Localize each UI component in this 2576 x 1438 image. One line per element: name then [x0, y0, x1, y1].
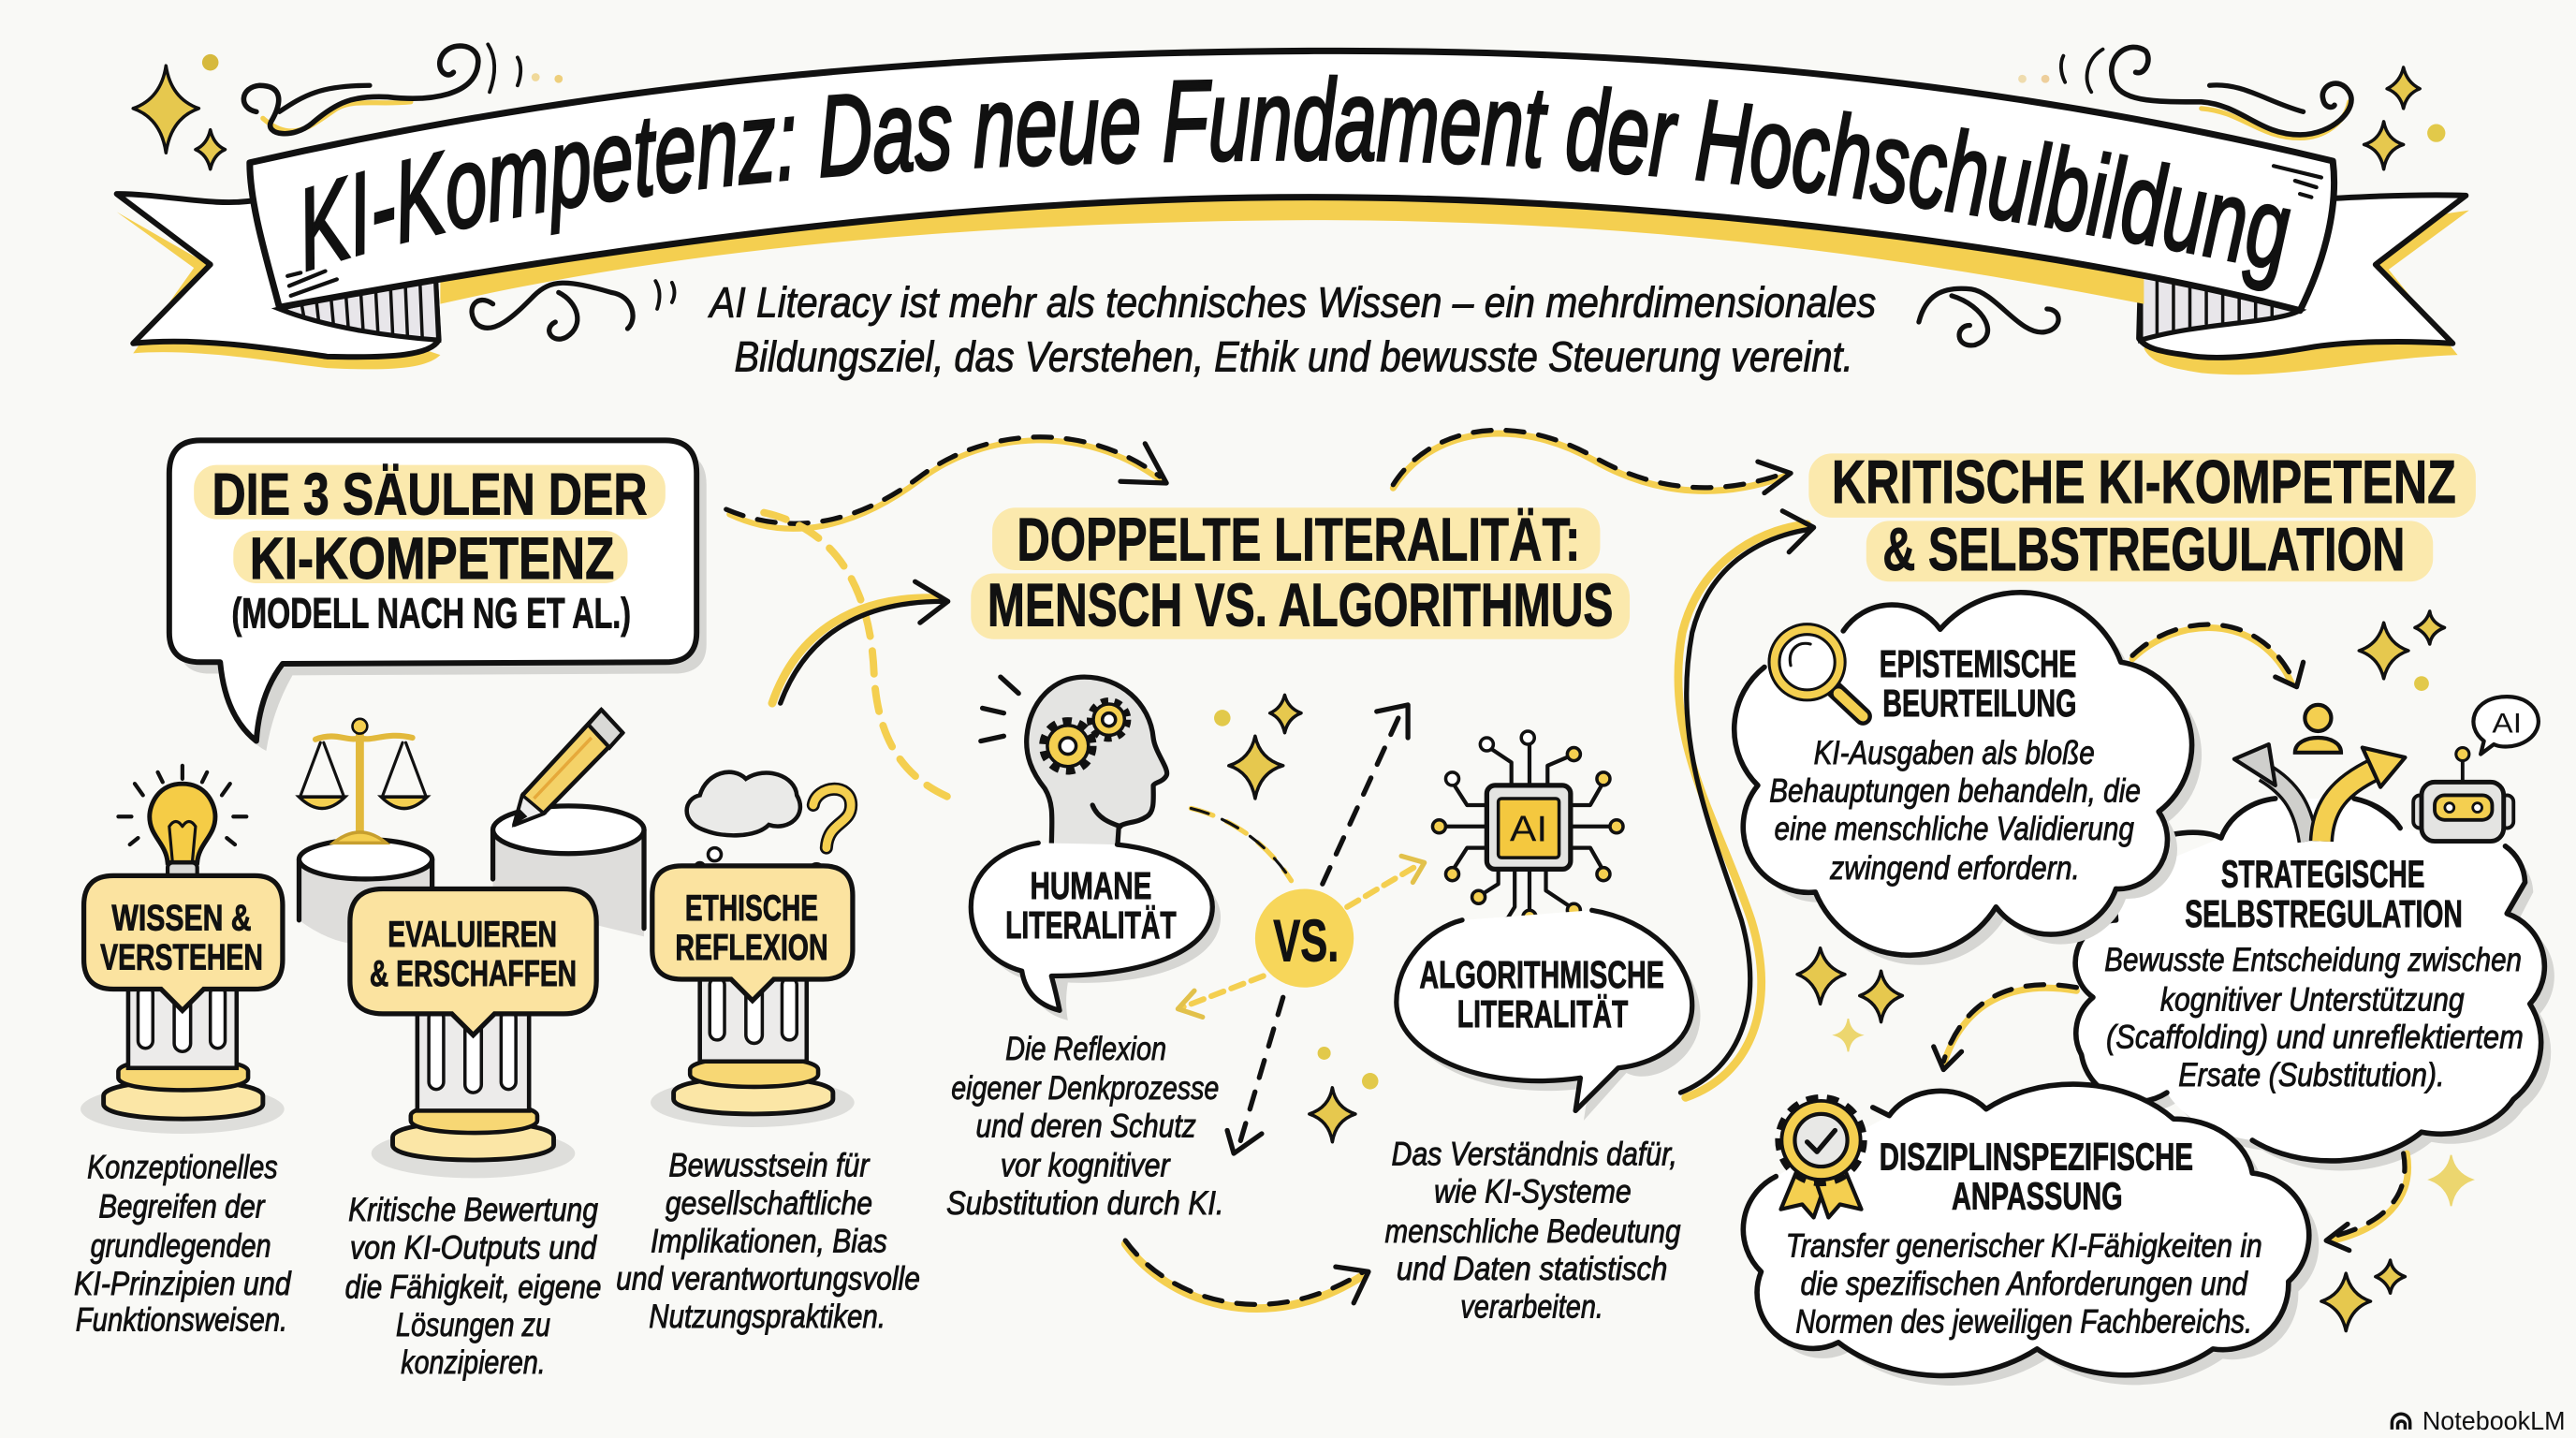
- cloud: disziplinspezifische anpassung: [1743, 1084, 2319, 1386]
- heading speech bubble: KI-KOMPETENZ: [250, 526, 614, 592]
- speech bubble: algorithmische literalitaet: LITERALITÄT: [1457, 992, 1629, 1035]
- arrow: S curve to kritische ki-kompetenz: [1678, 511, 1814, 1097]
- text: Wissen und Verstehen: [74, 1149, 292, 1339]
- icon: thought cloud and question mark: [687, 772, 851, 878]
- speech bubble: humane literalitaet: HUMANE: [1030, 864, 1151, 907]
- banner main ribbon: [250, 51, 2334, 311]
- text: humane literalitaet: Die Reflexion: [1005, 1031, 1166, 1067]
- label: Wissen und Verstehen: [84, 875, 283, 1010]
- text: Wissen und Verstehen: Funktionsweisen.: [76, 1302, 287, 1339]
- label: Wissen und Verstehen: VERSTEHEN: [100, 937, 263, 977]
- icon: AI chip: [1432, 731, 1623, 932]
- cloud: strategische selbstregulation: STRATEGISCHE: [2221, 853, 2424, 896]
- text: Evaluieren und Erschaffen: konzipieren.: [401, 1344, 546, 1381]
- text: Wissen und Verstehen: Begreifen der: [98, 1188, 266, 1225]
- text: humane literalitaet: eigener Denkprozesse: [951, 1070, 1219, 1107]
- cloud: epistemische beurteilung: [1734, 593, 2202, 965]
- cloud: strategische selbstregulation: [2075, 799, 2554, 1171]
- pillar 3: Ethische Reflexion: [616, 866, 920, 1335]
- text: algorithmische literalitaet: menschliche Bedeutung: [1385, 1213, 1681, 1250]
- subtitle: Bildungsziel, das Verstehen, Ethik und bewusste Steuerung vereint.: [735, 333, 1853, 381]
- arrow: yellow dashed curve: [764, 513, 956, 800]
- sparkle: banner left large: [133, 66, 198, 153]
- cloud: disziplinspezifische anpassung: DISZIPLINSPEZIFISCHE: [1880, 1136, 2193, 1179]
- text: Evaluieren und Erschaffen: Kritische Bewertung: [348, 1192, 598, 1228]
- subtitle: AI Literacy ist mehr als technisches Wissen – ein mehrdimensionales: [708, 279, 1876, 327]
- cloud: disziplinspezifische anpassung: ANPASSUNG: [1952, 1175, 2123, 1218]
- icon: human head with gears: [981, 677, 1167, 851]
- text: Ethische Reflexion: Implikationen, Bias: [651, 1223, 887, 1259]
- pillar 2: Evaluieren und Erschaffen: [345, 888, 601, 1381]
- icon: light bulb: [118, 766, 246, 886]
- VS badge: VS.: [1273, 909, 1339, 975]
- cloud: epistemische beurteilung: BEURTEILUNG: [1882, 682, 2076, 725]
- icon: robot with AI bubble: AI: [2492, 709, 2522, 740]
- heading: kritische ki-kompetenz: & SELBSTREGULATION: [1882, 515, 2405, 583]
- NotebookLM watermark: NotebookLM: [2422, 1406, 2566, 1435]
- cloud: epistemische beurteilung: zwingend erfordern.: [1829, 850, 2080, 887]
- panel: doppelte literalitaet: [946, 505, 1701, 1326]
- heading: kritische ki-kompetenz: [1808, 448, 2476, 583]
- text: Ethische Reflexion: [616, 1148, 920, 1335]
- title banner: [114, 47, 2469, 374]
- text: humane literalitaet: [946, 1031, 1224, 1222]
- cloud: epistemische beurteilung: eine menschliche Validierung: [1774, 811, 2134, 847]
- back cylinder: evaluate scales: [299, 840, 432, 945]
- cloud: strategische selbstregulation: Ersate (Substitution).: [2178, 1057, 2445, 1093]
- heading: doppelte literalitaet: DOPPELTE LITERALITÄT:: [1017, 505, 1580, 573]
- label: Wissen und Verstehen: WISSEN &: [111, 898, 252, 938]
- dot: banner right: [2427, 125, 2445, 142]
- text: algorithmische literalitaet: verarbeiten.: [1460, 1289, 1603, 1326]
- banner accent strokes: [287, 166, 2321, 296]
- sparkles right: [1797, 611, 2472, 1331]
- cloud: strategische selbstregulation: SELBSTREGULATION: [2185, 892, 2463, 935]
- text: humane literalitaet: vor kognitiver: [1001, 1148, 1171, 1184]
- cloud: disziplinspezifische anpassung: Transfer generischer KI-Fähigkeiten in: [1786, 1228, 2262, 1265]
- subtitle: [708, 279, 1876, 381]
- cloud: disziplinspezifische anpassung: die spezifischen Anforderungen und: [1801, 1266, 2248, 1302]
- heading: doppelte literalitaet: [971, 505, 1630, 639]
- cloud: strategische selbstregulation: (Scaffolding) und unreflektiertem: [2106, 1020, 2524, 1056]
- label: Ethische Reflexion: ETHISCHE: [685, 888, 818, 929]
- pillar column 1: [80, 983, 285, 1134]
- icon: scales: [299, 719, 427, 843]
- cloud: epistemische beurteilung: EPISTEMISCHE: [1880, 642, 2076, 685]
- text: Evaluieren und Erschaffen: von KI-Outputs und: [350, 1229, 597, 1266]
- text: Ethische Reflexion: gesellschaftliche: [666, 1185, 872, 1222]
- banner left tail: [117, 194, 440, 369]
- text: Ethische Reflexion: und verantwortungsvolle: [616, 1261, 920, 1298]
- speech bubble: algorithmische literalitaet: [1397, 910, 1701, 1121]
- text: Ethische Reflexion: Bewusstsein für: [668, 1148, 871, 1184]
- heading speech bubble: [169, 440, 707, 751]
- label: Ethische Reflexion: REFLEXION: [675, 928, 828, 968]
- icon: fork arrows with person: [2234, 705, 2405, 842]
- banner right tail: [2139, 195, 2469, 374]
- text: Evaluieren und Erschaffen: die Fähigkeit, eigene: [345, 1269, 601, 1305]
- heading speech bubble: DIE 3 SÄULEN DER: [212, 462, 648, 527]
- label: Evaluieren und Erschaffen: [350, 888, 596, 1035]
- text: Wissen und Verstehen: grundlegenden: [91, 1228, 271, 1265]
- sparkle: banner right upper: [2387, 67, 2420, 109]
- arrow: bottom curve: [1125, 1240, 1368, 1309]
- icon: pencil: [514, 710, 622, 825]
- VS badge: [1255, 888, 1354, 988]
- label: Evaluieren und Erschaffen: EVALUIEREN: [388, 915, 557, 955]
- label: Evaluieren und Erschaffen: & ERSCHAFFEN: [370, 954, 577, 994]
- text: humane literalitaet: und deren Schutz: [976, 1108, 1196, 1144]
- icon: robot with AI bubble: [2413, 697, 2539, 842]
- sparkle: banner right lower: [2364, 122, 2404, 169]
- sparkle: banner left small: [196, 130, 225, 169]
- sparkles middle: [1214, 695, 1379, 1142]
- icon: badge: [1780, 1099, 1862, 1217]
- arrow: dashed to kritische ki-kompetenz: [1393, 430, 1791, 493]
- cloud: epistemische beurteilung: KI-Ausgaben als bloße: [1814, 735, 2095, 771]
- arrow: solid curve to doppelte literalitaet: [772, 581, 948, 703]
- text: algorithmische literalitaet: und Daten statistisch: [1397, 1251, 1667, 1287]
- pillar column 3: [651, 973, 855, 1127]
- text: Evaluieren und Erschaffen: Lösungen zu: [396, 1307, 550, 1343]
- cloud: epistemische beurteilung: Behauptungen behandeln, die: [1769, 772, 2141, 809]
- speech bubble: algorithmische literalitaet: ALGORITHMISCHE: [1419, 953, 1664, 996]
- text: humane literalitaet: Substitution durch KI.: [946, 1185, 1224, 1222]
- heading speech bubble: (MODELL NACH NG ET AL.): [232, 589, 631, 637]
- text: Evaluieren und Erschaffen: [345, 1192, 601, 1381]
- arrow: dashed saeulen to doppelte literalitaet: [726, 437, 1166, 529]
- speech bubble: humane literalitaet: LITERALITÄT: [1005, 903, 1177, 946]
- label: Ethische Reflexion: [652, 866, 853, 1001]
- arrows around VS: [1178, 705, 1425, 1153]
- icon: AI chip: AI: [1510, 810, 1547, 850]
- banner yellow shadow: [440, 181, 2144, 304]
- text: Wissen und Verstehen: KI-Prinzipien und: [74, 1266, 292, 1302]
- heading: doppelte literalitaet: MENSCH VS. ALGORITHMUS: [988, 571, 1613, 639]
- speech bubble: humane literalitaet: [971, 843, 1221, 1020]
- arrows between clouds: [1934, 624, 2408, 1251]
- pillar column 2: [372, 1005, 575, 1178]
- cloud: strategische selbstregulation: kognitiver Unterstützung: [2160, 981, 2465, 1018]
- text: algorithmische literalitaet: Das Verständnis dafür,: [1392, 1136, 1677, 1172]
- dot: banner left: [202, 54, 218, 70]
- icon: magnifier: [1774, 629, 1863, 716]
- flourishes around banner: [243, 44, 2351, 345]
- back cylinder: create pencil: [493, 806, 644, 936]
- cloud: disziplinspezifische anpassung: Normen des jeweiligen Fachbereichs.: [1795, 1303, 2252, 1340]
- panel: drei Saeulen: [74, 440, 920, 1381]
- text: algorithmische literalitaet: [1385, 1136, 1681, 1326]
- pillar 1: Wissen und Verstehen: [74, 766, 292, 1339]
- text: Wissen und Verstehen: Konzeptionelles: [87, 1149, 278, 1185]
- text: Ethische Reflexion: Nutzungspraktiken.: [649, 1299, 886, 1335]
- text: algorithmische literalitaet: wie KI-Systeme: [1434, 1174, 1632, 1211]
- title text: KI-Kompetenz: Das neue Fundament der Hochschulbildung: [305, 75, 2291, 291]
- panel: kritische ki-kompetenz: [1734, 448, 2554, 1386]
